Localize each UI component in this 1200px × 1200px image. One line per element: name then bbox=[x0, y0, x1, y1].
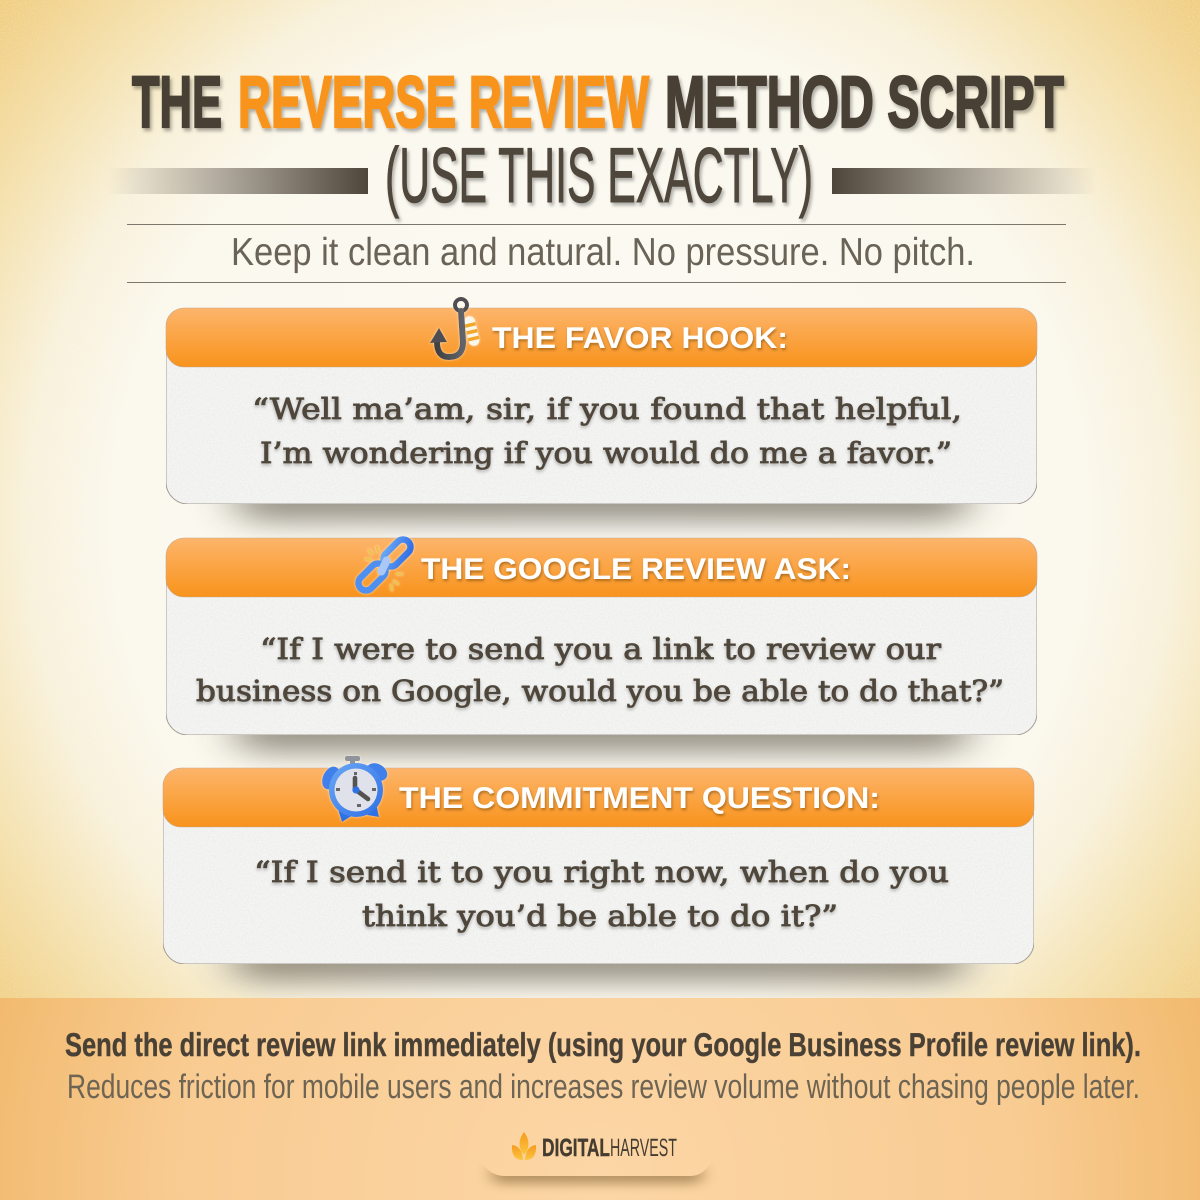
subtitle with side bars bbox=[108, 131, 1096, 219]
tagline: Keep it clean and natural. No pressure. No pitch. bbox=[231, 231, 975, 274]
title: REVERSE REVIEW bbox=[238, 62, 649, 143]
quote text: think you’d be able to do it?” bbox=[362, 899, 838, 933]
panel: the favor hook bbox=[166, 299, 1037, 522]
header text: THE COMMITMENT QUESTION: bbox=[399, 782, 880, 815]
icon: broken chain link bbox=[355, 536, 414, 594]
quote text: “Well ma’am, sir, if you found that helpful, bbox=[252, 392, 962, 426]
icon: alarm clock bbox=[319, 756, 391, 822]
icon: fish hook bbox=[430, 299, 481, 357]
quote text bbox=[252, 392, 962, 470]
header bar bbox=[166, 308, 1037, 367]
quote text: I’m wondering if you would do me a favor.” bbox=[260, 436, 952, 470]
header bar bbox=[163, 768, 1034, 827]
header bar bbox=[166, 538, 1037, 597]
title: THE bbox=[132, 62, 222, 143]
subtitle with side bars: (USE THIS EXACTLY) bbox=[385, 131, 813, 219]
logo wordmark: DIGITAL bbox=[542, 1134, 610, 1162]
footer strip bbox=[0, 998, 1200, 1200]
header text: THE GOOGLE REVIEW ASK: bbox=[421, 553, 851, 586]
quote text: business on Google, would you be able to do that?” bbox=[196, 674, 1004, 708]
quote text: “If I send it to you right now, when do you bbox=[254, 855, 949, 889]
quote text bbox=[254, 855, 949, 933]
icon: wheat bbox=[512, 1132, 536, 1160]
panel: the commitment question bbox=[163, 756, 1034, 982]
logo wordmark: HARVEST bbox=[610, 1134, 677, 1162]
logo tab bbox=[472, 1130, 720, 1184]
quote text bbox=[196, 632, 1004, 708]
quote text: “If I were to send you a link to review our bbox=[260, 632, 941, 666]
panel: the google review ask bbox=[166, 536, 1037, 753]
header text: THE FAVOR HOOK: bbox=[492, 322, 788, 355]
